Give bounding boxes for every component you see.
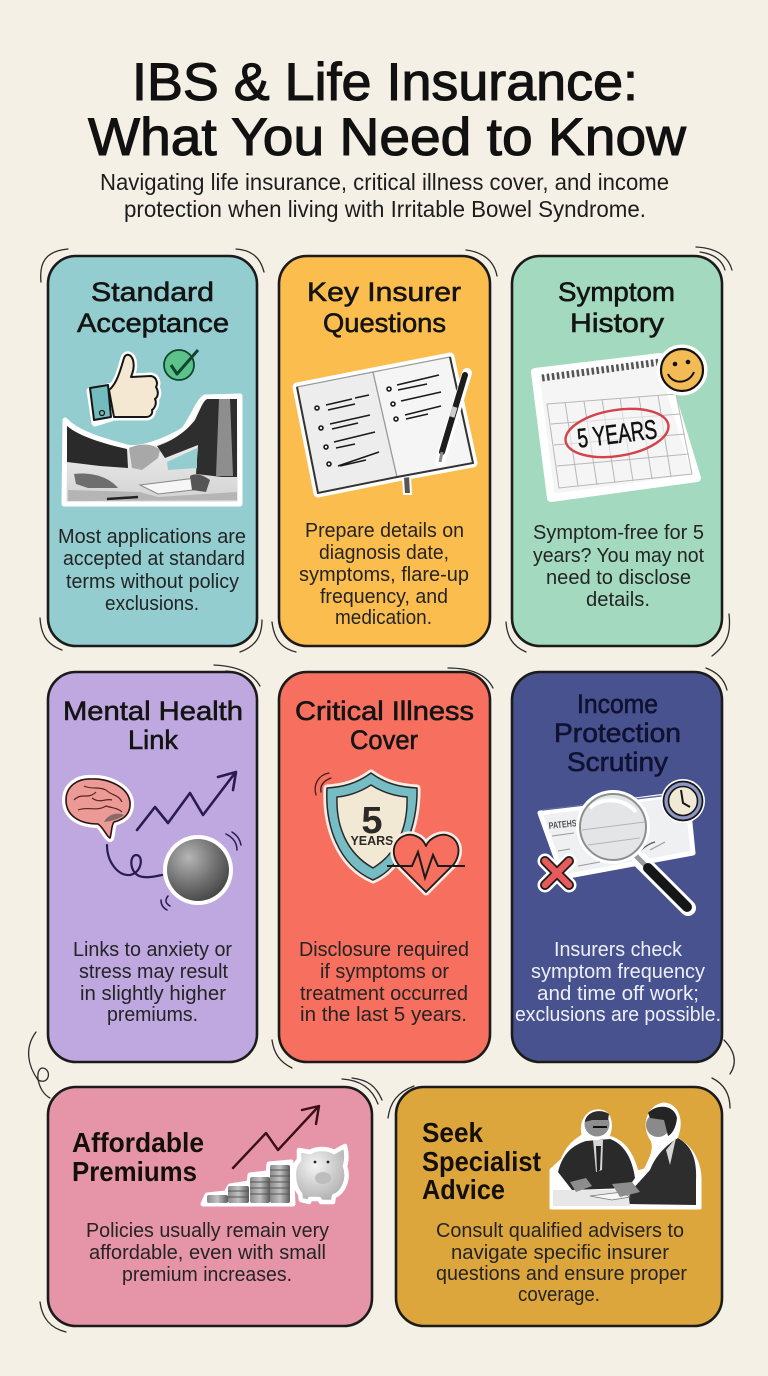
icon: thumbs up xyxy=(90,355,158,423)
icon: smiley xyxy=(659,347,705,393)
panel: income protection scrutiny xyxy=(512,672,722,1062)
body text: symptoms, flare-up xyxy=(299,564,469,586)
body text: accepted at standard xyxy=(63,548,245,570)
body text xyxy=(533,522,704,611)
heading: Acceptance xyxy=(77,308,229,338)
heading: Link xyxy=(128,725,179,755)
icon: clock xyxy=(661,779,705,823)
body text: Insurers check xyxy=(554,939,683,961)
body text: terms without policy xyxy=(66,571,239,593)
panel: critical illness cover xyxy=(279,672,490,1062)
heading: Premiums xyxy=(72,1156,197,1187)
body text: exclusions. xyxy=(105,593,199,615)
body text: Disclosure required xyxy=(299,939,469,961)
icon: red cross xyxy=(545,861,569,885)
panel: affordable premiums xyxy=(48,1087,372,1326)
icon: piggy bank xyxy=(294,1146,347,1202)
title xyxy=(88,53,687,167)
heading: Key Insurer xyxy=(307,277,461,307)
body text: need to disclose xyxy=(546,567,691,589)
body text: symptom frequency xyxy=(531,961,705,983)
sketch strokes around panels xyxy=(29,247,734,1332)
heading: Income xyxy=(577,689,658,719)
body text: navigate specific insurer xyxy=(451,1242,669,1264)
heading xyxy=(554,689,681,777)
body text: Prepare details on xyxy=(305,520,464,542)
card background xyxy=(512,672,722,1062)
icon: document under magnifier xyxy=(540,793,693,877)
heading xyxy=(63,696,243,755)
body text: Policies usually remain very xyxy=(86,1220,329,1242)
body text xyxy=(86,1220,329,1286)
arrow: rising trend xyxy=(233,1106,319,1168)
heading xyxy=(422,1117,541,1205)
body text: coverage. xyxy=(518,1284,600,1306)
body text: questions and ensure proper xyxy=(436,1263,687,1285)
body text: details. xyxy=(586,589,650,611)
icon: calendar: 5 YEARS xyxy=(576,414,659,454)
body text: years? You may not xyxy=(533,545,704,567)
icon: brain xyxy=(66,779,130,838)
heading: Specialist xyxy=(422,1146,541,1177)
icon: shield: YEARS xyxy=(350,834,394,848)
card background xyxy=(279,672,490,1062)
heading xyxy=(307,277,461,338)
card background xyxy=(512,256,722,646)
heading xyxy=(558,277,675,338)
body text: Most applications are xyxy=(58,526,246,548)
photo: handshake xyxy=(64,396,240,504)
body text: if symptoms or xyxy=(320,961,449,983)
body text: in slightly higher xyxy=(80,983,226,1005)
body text: Links to anxiety or xyxy=(73,939,232,961)
body text: premium increases. xyxy=(122,1264,292,1286)
subtitle xyxy=(100,169,669,222)
heading xyxy=(295,696,474,755)
heading: Protection xyxy=(554,718,681,748)
icon: stress ball xyxy=(161,832,241,910)
heading: History xyxy=(570,308,665,338)
panel: standard acceptance xyxy=(48,256,257,646)
panel: key insurer questions xyxy=(279,256,490,646)
body text: exclusions are possible. xyxy=(515,1004,721,1026)
arrow: rising zigzag xyxy=(137,772,236,830)
body text: diagnosis date, xyxy=(319,542,449,564)
panel: mental health link xyxy=(48,672,257,1062)
heading: Affordable xyxy=(72,1127,204,1158)
heading: Symptom xyxy=(558,277,675,307)
panel: symptom history xyxy=(512,256,722,646)
heading xyxy=(72,1127,204,1187)
squiggle line xyxy=(107,845,162,877)
icon: green check xyxy=(164,350,198,380)
icon: calendar xyxy=(535,357,697,498)
heading: Cover xyxy=(350,725,418,755)
body text xyxy=(73,939,232,1026)
heading xyxy=(77,277,229,338)
icon: motion marks xyxy=(315,773,331,795)
body text: in the last 5 years. xyxy=(300,1004,467,1026)
icon: heart with pulse xyxy=(387,835,465,892)
heading: Seek xyxy=(422,1117,483,1148)
title: What You Need to Know xyxy=(88,108,687,167)
body text xyxy=(58,526,246,615)
body text: treatment occurred xyxy=(300,983,468,1005)
body text: medication. xyxy=(335,607,432,629)
icon: coin stacks xyxy=(203,1162,293,1204)
body text: frequency, and xyxy=(320,586,448,608)
subtitle: protection when living with Irritable Bowel Syndrome. xyxy=(124,196,646,222)
heading: Standard xyxy=(91,277,214,307)
panel: seek specialist advice xyxy=(396,1087,722,1326)
body text xyxy=(299,520,469,629)
icon: magnifying glass xyxy=(576,790,688,908)
body text xyxy=(299,939,469,1026)
body text: stress may result xyxy=(79,961,228,983)
heading: Advice xyxy=(422,1174,505,1205)
heading: Scrutiny xyxy=(567,747,669,777)
body text: affordable, even with small xyxy=(89,1242,326,1264)
body text xyxy=(515,939,721,1026)
subtitle: Navigating life insurance, critical illness cover, and income xyxy=(100,169,669,195)
icon: open notebook and pen xyxy=(297,357,473,494)
card background xyxy=(279,256,490,646)
title: IBS & Life Insurance: xyxy=(132,53,638,112)
body text: Symptom-free for 5 xyxy=(533,522,704,544)
heading: Critical Illness xyxy=(295,696,474,726)
card background xyxy=(48,256,257,646)
photo: two advisers xyxy=(551,1104,700,1208)
heading: Mental Health xyxy=(63,696,243,726)
card background xyxy=(48,1087,372,1326)
body text: and time off work; xyxy=(537,983,699,1005)
body text: Consult qualified advisers to xyxy=(436,1220,684,1242)
card background xyxy=(396,1087,722,1326)
icon: shield: 5 xyxy=(361,800,383,842)
icon: shield xyxy=(327,773,417,880)
card background xyxy=(48,672,257,1062)
body text xyxy=(436,1220,687,1306)
heading: Questions xyxy=(323,308,446,338)
body text: premiums. xyxy=(107,1004,198,1026)
icon: document under magnifier: PATEHSEK xyxy=(548,817,587,832)
